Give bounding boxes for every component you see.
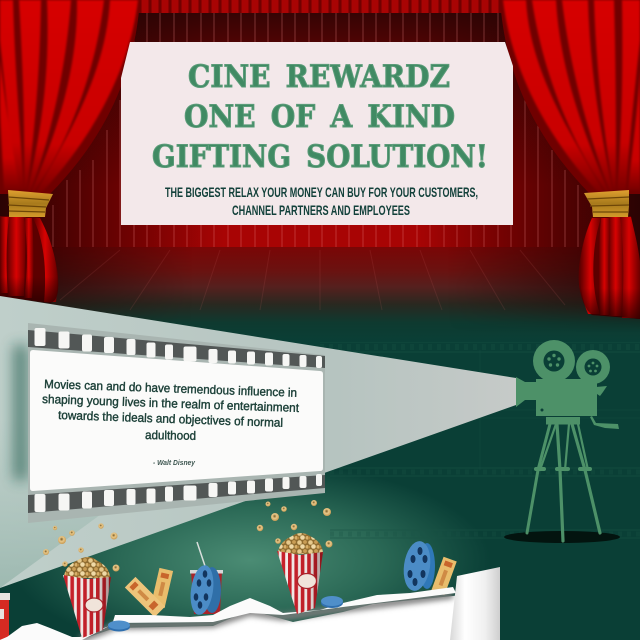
film strip bottom perforations — [34, 474, 322, 512]
right curtain lower gathered drape — [579, 216, 640, 319]
stage back wall — [0, 0, 640, 248]
tripod legs — [527, 424, 600, 541]
icon: small film canisters — [108, 596, 343, 632]
quote text: shaping young lives in the realm of entertainment — [42, 392, 300, 415]
left curtain lower gathered drape — [0, 216, 58, 303]
heading: main title: CINE REWARDZ — [188, 59, 450, 95]
popcorn scatter left — [43, 523, 120, 572]
left curtain gold tie-back — [8, 190, 53, 217]
white quote card — [30, 350, 323, 491]
icon: soda cup with straw — [190, 542, 223, 614]
subtitle text: CHANNEL PARTNERS AND EMPLOYEES — [232, 202, 410, 218]
quote text: towards the ideals and objectives of normal — [58, 408, 283, 430]
tripod head and crank — [546, 417, 580, 424]
quote text: Movies can and do have tremendous influence in — [44, 377, 297, 400]
quote text: adulthood — [145, 428, 196, 443]
subtitle text: THE BIGGEST RELAX YOUR MONEY CAN BUY FOR YOUR CUSTOMERS, — [165, 184, 478, 200]
icon: cup left edge — [0, 593, 10, 640]
icon: film projector on tripod — [504, 340, 620, 543]
camera body and lens — [536, 379, 597, 416]
icon: film reel with cup — [188, 564, 221, 616]
icon: tickets pair — [125, 568, 173, 617]
subtitle text — [165, 184, 478, 218]
quote attribution: - Walt Disney — [153, 460, 196, 467]
right curtain — [500, 0, 640, 319]
torn paper white strip — [0, 587, 456, 640]
left curtain — [0, 0, 140, 303]
quote text — [42, 377, 300, 443]
popcorn scatter middle — [257, 500, 332, 548]
top valance — [130, 0, 510, 13]
panel: film strip quote — [14, 323, 325, 523]
film strip body — [28, 323, 325, 523]
film reels — [533, 340, 575, 382]
icon: popcorn box left — [63, 557, 111, 638]
torn paper — [0, 567, 500, 640]
heading: main title: ONE OF A KIND — [184, 99, 455, 135]
film strip top perforations — [34, 328, 322, 368]
right curtain gold tie-back — [584, 190, 629, 217]
stage floor — [0, 247, 640, 342]
projector light beam — [0, 296, 516, 588]
tripod shadow — [504, 531, 620, 543]
heading: main title — [152, 59, 488, 175]
icon: film reel right — [401, 539, 435, 593]
panel: title board — [121, 42, 513, 225]
paper roll — [450, 567, 500, 640]
icon: ticket right — [431, 557, 457, 595]
icon: popcorn box middle — [277, 533, 323, 614]
heading: main title: GIFTING SOLUTION! — [152, 139, 488, 175]
